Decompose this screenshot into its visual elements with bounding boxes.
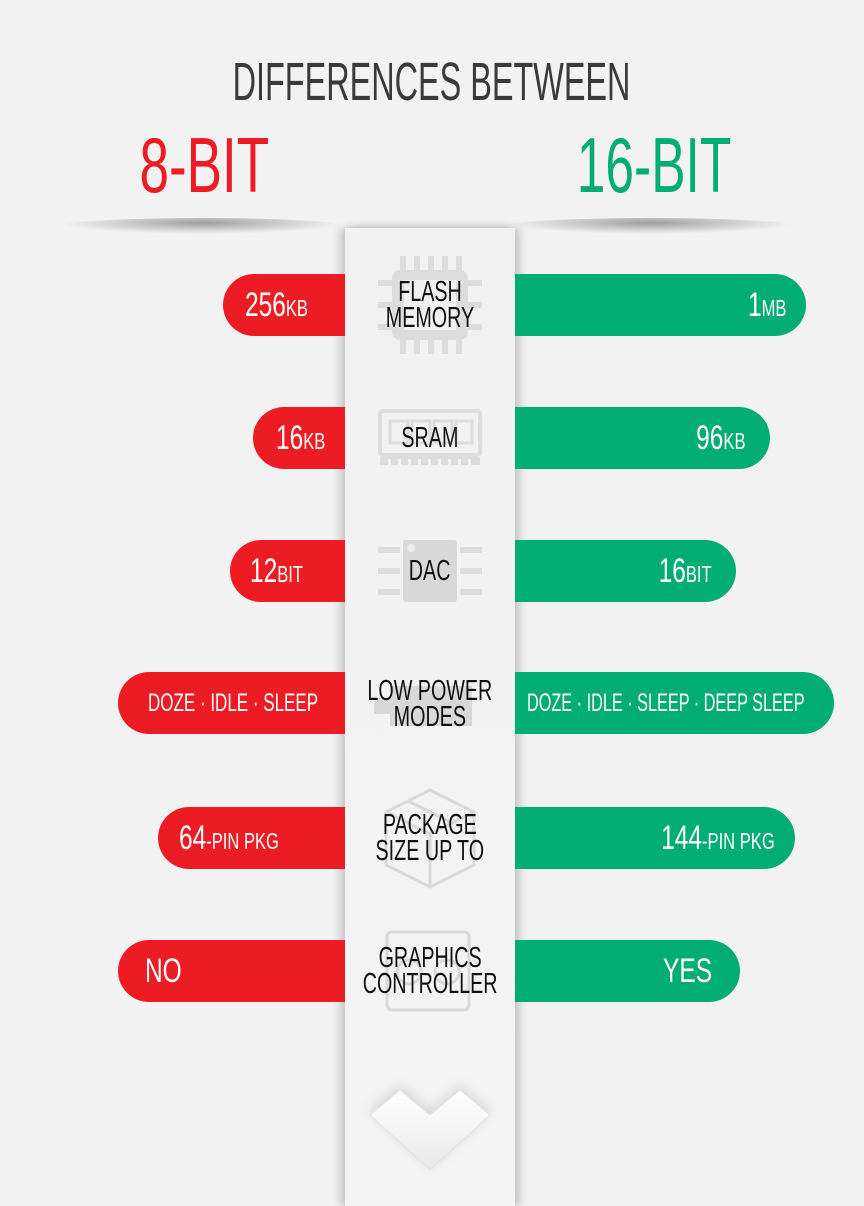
label: graphics controller: CONTROLLER [363, 968, 497, 1000]
red bar 16KB: 16KB [276, 419, 325, 457]
label: package size: PACKAGE [383, 809, 477, 841]
title: DIFFERENCES BETWEEN [233, 52, 631, 112]
green bar yes [515, 940, 740, 1002]
green bar 16BIT [515, 540, 736, 602]
row: flash memory [223, 256, 806, 354]
red bar 12BIT [230, 540, 345, 602]
heading: 16-bit: 16-BIT [577, 121, 731, 209]
label: graphics controller [363, 942, 497, 1000]
green bar 1MB [515, 274, 806, 336]
red bar 64-pin [158, 807, 345, 869]
icon: down chevron [370, 1085, 490, 1170]
row: package [158, 788, 795, 888]
green bar modes: DOZE · IDLE · SLEEP · DEEP SLEEP [527, 689, 805, 717]
label: flash memory: FLASH [398, 276, 462, 308]
icon: ic package [378, 540, 482, 602]
red bar modes [118, 672, 345, 734]
icon: graphics card [386, 930, 470, 1012]
label: low power modes [368, 675, 492, 733]
red bar 12BIT: 12BIT [250, 552, 303, 590]
red bar no [118, 940, 345, 1002]
row: graphics [118, 930, 740, 1012]
red bar no: NO [145, 952, 182, 990]
label: graphics controller: GRAPHICS [378, 942, 481, 974]
green bar 144-pin [515, 807, 795, 869]
green bar 16BIT: 16BIT [659, 552, 712, 590]
row: low power modes [118, 672, 834, 734]
green bar yes: YES [663, 952, 712, 990]
label: package size: SIZE UP TO [376, 835, 484, 867]
row: dac [230, 540, 736, 602]
center column [345, 228, 515, 1206]
heading: 8-bit: 8-BIT [139, 121, 269, 209]
green bar 144-pin: 144-PIN PKG [661, 819, 775, 857]
green bar 96KB [515, 407, 770, 469]
icon: ram module [378, 409, 482, 465]
label: flash memory: MEMORY [386, 302, 474, 334]
red bar modes: DOZE · IDLE · SLEEP [148, 689, 318, 717]
label: low power modes: LOW POWER [368, 675, 492, 707]
label: sram: SRAM [402, 422, 458, 454]
red bar 16KB [253, 407, 345, 469]
shadow under 8-bit [60, 218, 345, 234]
icon: battery [374, 686, 472, 726]
red bar 64-pin: 64-PIN PKG [179, 819, 279, 857]
green bar 96KB: 96KB [697, 419, 746, 457]
label: dac: DAC [409, 555, 451, 587]
green bar modes [515, 672, 834, 734]
red bar 256KB [223, 274, 345, 336]
red bar 256KB: 256KB [245, 286, 308, 324]
row: sram [253, 407, 770, 469]
green bar 1MB: 1MB [748, 286, 786, 324]
label: package size [376, 809, 484, 867]
icon: box [384, 788, 476, 888]
label: low power modes: MODES [394, 701, 466, 733]
shadow under 16-bit [505, 218, 795, 234]
label: flash memory [386, 276, 474, 334]
icon: chip [378, 256, 482, 354]
